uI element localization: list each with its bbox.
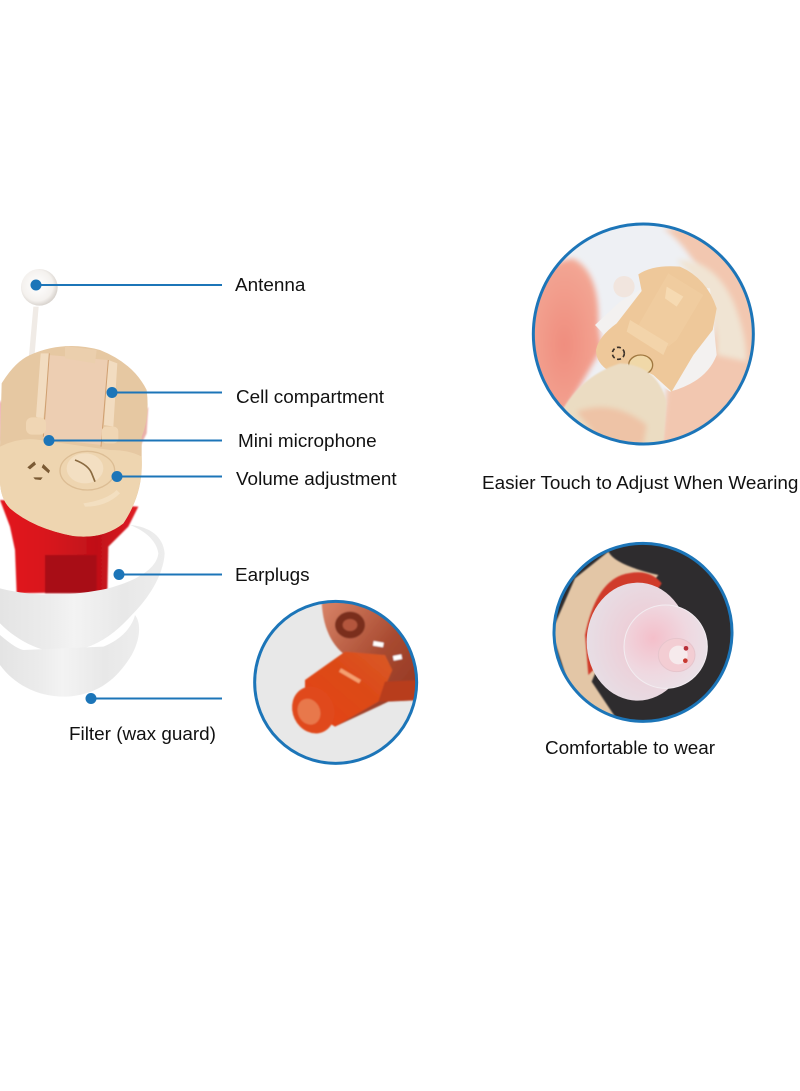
callout: volume adjustment (112, 469, 397, 490)
panel: easier touch photo circle (527, 224, 760, 448)
callout: cell compartment: Cell compartment (236, 387, 385, 408)
beige shell (0, 346, 148, 537)
callout: volume adjustment: Volume adjustment (236, 469, 397, 490)
red body (0, 400, 148, 593)
callout: filter (wax guard) (69, 693, 222, 745)
callout: earplugs (114, 565, 310, 586)
callout: mini microphone (44, 431, 377, 452)
icon: antenna (21, 269, 58, 370)
callout: filter (wax guard): Filter (wax guard) (69, 724, 216, 745)
left finger (534, 256, 604, 408)
right finger (663, 228, 752, 440)
antenna bead (613, 276, 635, 297)
panel: filter close-up circle (255, 601, 422, 763)
callout: mini microphone: Mini microphone (238, 431, 377, 452)
callout: cell compartment (106, 387, 385, 408)
volume wheel (60, 451, 115, 490)
cell compartment door (43, 355, 108, 445)
earplug: upper dome (0, 525, 165, 653)
microphone holes (612, 347, 624, 359)
white backing (595, 282, 717, 392)
callout: antenna (30, 275, 306, 296)
microphone holes (27, 461, 50, 480)
device (596, 266, 717, 392)
panel: comfortable to wear photo circle (552, 543, 732, 722)
earplug: lower dome (0, 615, 139, 697)
volume wheel (629, 355, 653, 375)
text: easier touch caption: Easier Touch to Adjust When Wearing (482, 473, 798, 494)
text: comfortable caption: Comfortable to wear (545, 738, 715, 759)
thumb (563, 363, 667, 445)
callout: antenna: Antenna (235, 275, 306, 296)
callout: earplugs: Earplugs (235, 565, 310, 586)
hearing aid product illustration (0, 269, 165, 697)
